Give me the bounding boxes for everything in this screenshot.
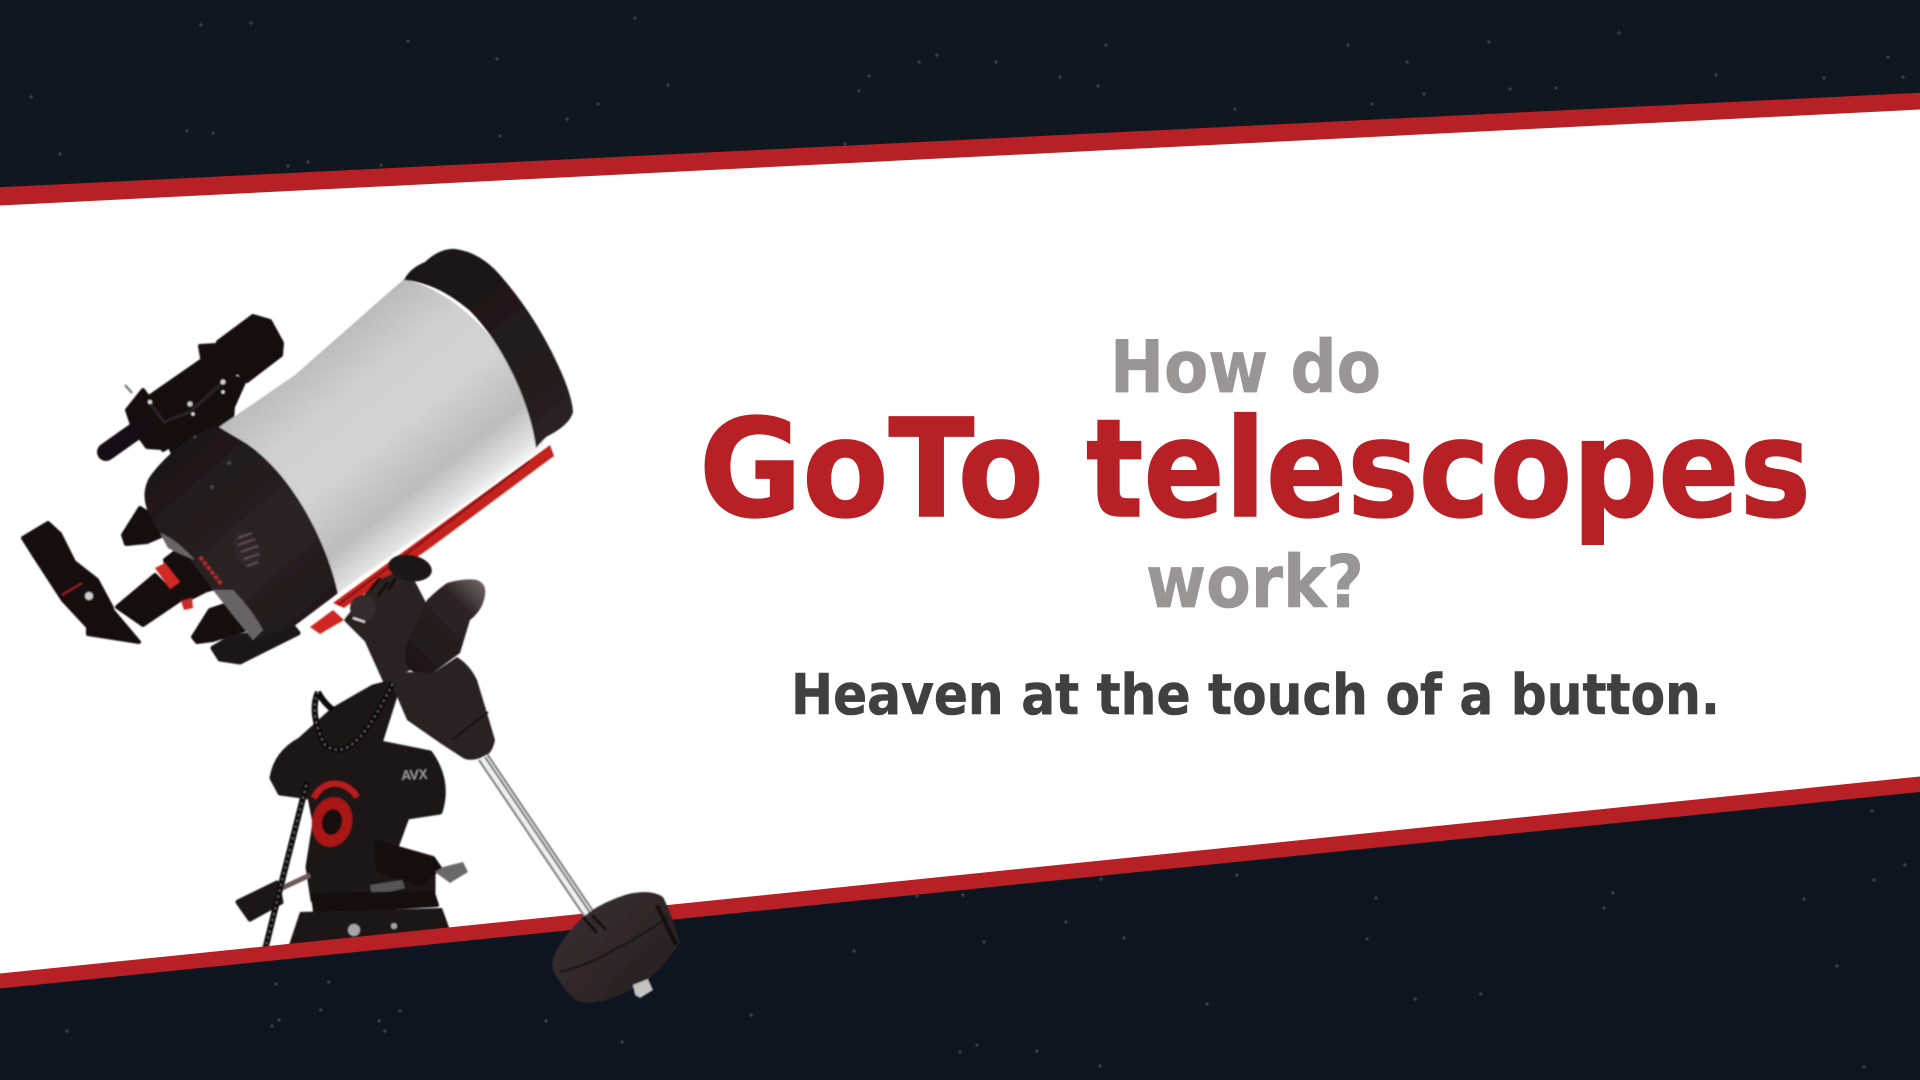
- red dovetail rail: [310, 445, 554, 634]
- control knobs and bottom plate: [123, 508, 298, 662]
- title line: work?: work?: [1146, 540, 1364, 624]
- counterweight shaft and weight: [483, 757, 680, 1002]
- background: bottom night sky: [0, 789, 1920, 1080]
- star diagonal eyepiece: [23, 523, 180, 642]
- rear cell bolts and speaker grille: [194, 436, 266, 573]
- latitude lock lever and chrome knob: [238, 842, 468, 919]
- mount motor housing: [272, 680, 443, 900]
- bottom red stripe: [0, 776, 1920, 988]
- title line: How do: How do: [1110, 325, 1381, 409]
- telescope body and mount: [23, 249, 573, 950]
- top red stripe: [0, 93, 1920, 206]
- rear cell grey crescent: [160, 533, 263, 640]
- main title: GoTo telescopes: GoTo: [699, 391, 1044, 549]
- hand controller cable: [265, 683, 393, 950]
- polar cone: [405, 579, 485, 674]
- silver optical tube: [219, 279, 545, 593]
- declination saddle and knobs: [347, 551, 434, 680]
- focuser with red ring: [155, 546, 228, 610]
- rear cell: [145, 427, 338, 640]
- counterweight edge and clamp details: [559, 905, 676, 972]
- front corrector ring: [404, 249, 573, 448]
- counterweight: [552, 892, 680, 1002]
- tripod head: [288, 893, 450, 948]
- counterweight bolt: [633, 979, 653, 998]
- subtitle: Heaven at the touch of a button.: [791, 663, 1720, 728]
- background: top night sky: [0, 0, 1920, 190]
- finder scope: [106, 316, 282, 458]
- main title: GoTo telescopes: telescopes: [1086, 391, 1811, 549]
- model text on mount: AVX: [401, 768, 428, 784]
- declination axis housing: [387, 657, 495, 760]
- red specks on the focuser: [200, 557, 222, 585]
- red altitude adjustment ring: [307, 784, 357, 851]
- counterweight shaft: [483, 757, 595, 920]
- dark stripe on declination housing: [452, 712, 488, 740]
- main title: GoTo telescopes: [699, 391, 1811, 549]
